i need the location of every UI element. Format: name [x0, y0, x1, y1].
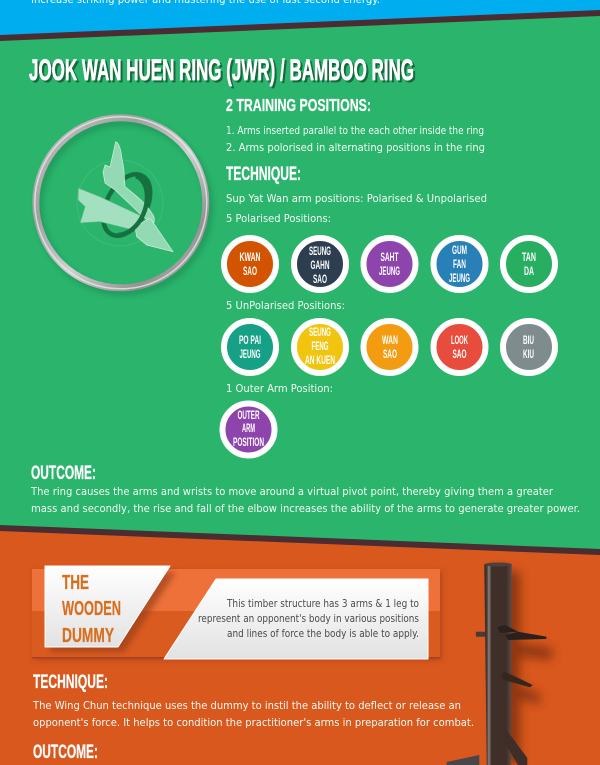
- circle: biu kiu: [503, 321, 555, 373]
- circle: kwan sao: SAO: [243, 266, 257, 278]
- dummy technique text: The Wing Chun technique uses the dummy to instil the ability to deflect or release an: [32, 699, 461, 712]
- icon: wooden dummy: [447, 562, 552, 765]
- polarised circles: [224, 238, 555, 290]
- label: unpolarised positions: 5 UnPolarised Positions:: [226, 299, 345, 312]
- circle: gum fan jeung: JEUNG: [449, 273, 470, 285]
- circle: gum fan jeung: FAN: [453, 259, 466, 271]
- dummy back arm: [476, 632, 486, 637]
- training positions list: 2. Arms polorised in alternating positions in the ring: [226, 141, 485, 154]
- dummy base: [447, 755, 479, 765]
- blue section background: [0, 0, 600, 38]
- banner tag title: DUMMY: [62, 625, 114, 647]
- orange section background: [0, 528, 600, 765]
- circle: outer arm position: POSITION: [233, 437, 264, 449]
- ring outcome text: [30, 485, 580, 515]
- training positions list: 1. Arms inserted parallel to the each other inside the ring: [226, 124, 484, 137]
- banner tag title: WOODEN: [62, 598, 121, 620]
- circle: seung feng an kuen: FENG: [312, 341, 329, 353]
- dummy technique text: [32, 699, 474, 729]
- circle: seung gahn sao: SEUNG: [309, 246, 331, 258]
- circle: outer arm position: ARM: [242, 423, 255, 435]
- banner tag title: THE: [62, 572, 89, 594]
- circle: look sao: SAO: [452, 349, 467, 361]
- technique description: Sup Yat Wan arm positions: Polarised & Unpolarised: [226, 192, 487, 205]
- green section background: [0, 0, 600, 560]
- circle: seung feng an kuen: [294, 321, 346, 373]
- banner description text: [198, 597, 419, 640]
- circle: saht jeung: [364, 238, 416, 290]
- circle: saht jeung: JEUNG: [379, 266, 400, 278]
- banner description text: represent an opponent's body in various positions: [198, 612, 419, 625]
- heading: dummy outcome: OUTCOME:: [33, 742, 98, 763]
- circle: seung feng an kuen: SEUNG: [309, 327, 331, 339]
- heading: ring outcome: OUTCOME:: [31, 463, 96, 484]
- unpolarised circles: [224, 321, 555, 373]
- circle: look sao: LOOK: [451, 335, 468, 347]
- circle: tan da: [503, 238, 555, 290]
- circle: outer arm position: OUTER: [238, 410, 260, 422]
- heading: 2 training positions: 2 TRAINING POSITIONS:: [226, 95, 371, 115]
- title: [29, 54, 416, 89]
- dummy upper arms: [497, 625, 518, 633]
- circle: tan da: DA: [524, 266, 534, 278]
- circle: wan sao: [364, 321, 416, 373]
- icon: ring with hands: [35, 117, 209, 292]
- heading: technique: TECHNIQUE:: [226, 164, 301, 185]
- circle: kwan sao: KWAN: [240, 252, 260, 264]
- circle: po pai jeung: PO PAI: [239, 335, 261, 347]
- banner description text: and lines of force the body is able to apply.: [227, 627, 419, 640]
- circle: outer arm position: [222, 404, 274, 456]
- label: polarised positions: 5 Polarised Positions:: [226, 212, 331, 225]
- heading: dummy technique: TECHNIQUE:: [33, 672, 108, 693]
- circle: gum fan jeung: [434, 238, 486, 290]
- circle: saht jeung: SAHT: [380, 252, 398, 264]
- label: outer arm position: 1 Outer Arm Position:: [226, 382, 333, 395]
- dummy technique text: opponent's force. It helps to condition the practitioner's arms in preparation for combat.: [33, 716, 474, 729]
- top divider band: [0, 10, 600, 41]
- circle: seung gahn sao: [294, 238, 346, 290]
- circle: kwan sao: [224, 238, 276, 290]
- bottom divider band: [0, 525, 600, 555]
- circle: biu kiu: KIU: [523, 349, 534, 361]
- circle: seung gahn sao: SAO: [313, 274, 327, 286]
- circle: seung gahn sao: GAHN: [310, 260, 330, 272]
- banner description box: [164, 579, 428, 659]
- circle: tan da: TAN: [522, 252, 536, 264]
- banner tag title: [62, 572, 121, 647]
- circle: wan sao: SAO: [383, 349, 397, 361]
- ring outcome text: The ring causes the arms and wrists to move around a virtual pivot point, thereby giving them a greater: [30, 485, 553, 498]
- circle: po pai jeung: JEUNG: [240, 349, 261, 361]
- circle: po pai jeung: [224, 321, 276, 373]
- banner tag shadow: [50, 572, 176, 652]
- dummy middle arm: [501, 672, 533, 687]
- training positions list: [226, 124, 485, 154]
- dummy post: [484, 564, 512, 765]
- banner description text: This timber structure has 3 arms & 1 leg to: [226, 597, 419, 610]
- dummy leg: [500, 728, 527, 765]
- circle: look sao: [434, 321, 486, 373]
- circle: gum fan jeung: GUM: [452, 245, 467, 257]
- banner tag: [45, 566, 170, 647]
- dummy shadow: [496, 568, 552, 765]
- circle: seung feng an kuen: AN KUEN: [305, 355, 335, 367]
- circle: biu kiu: BIU: [523, 335, 534, 347]
- circle: wan sao: WAN: [382, 335, 398, 347]
- panel: wooden dummy banner: [32, 566, 442, 660]
